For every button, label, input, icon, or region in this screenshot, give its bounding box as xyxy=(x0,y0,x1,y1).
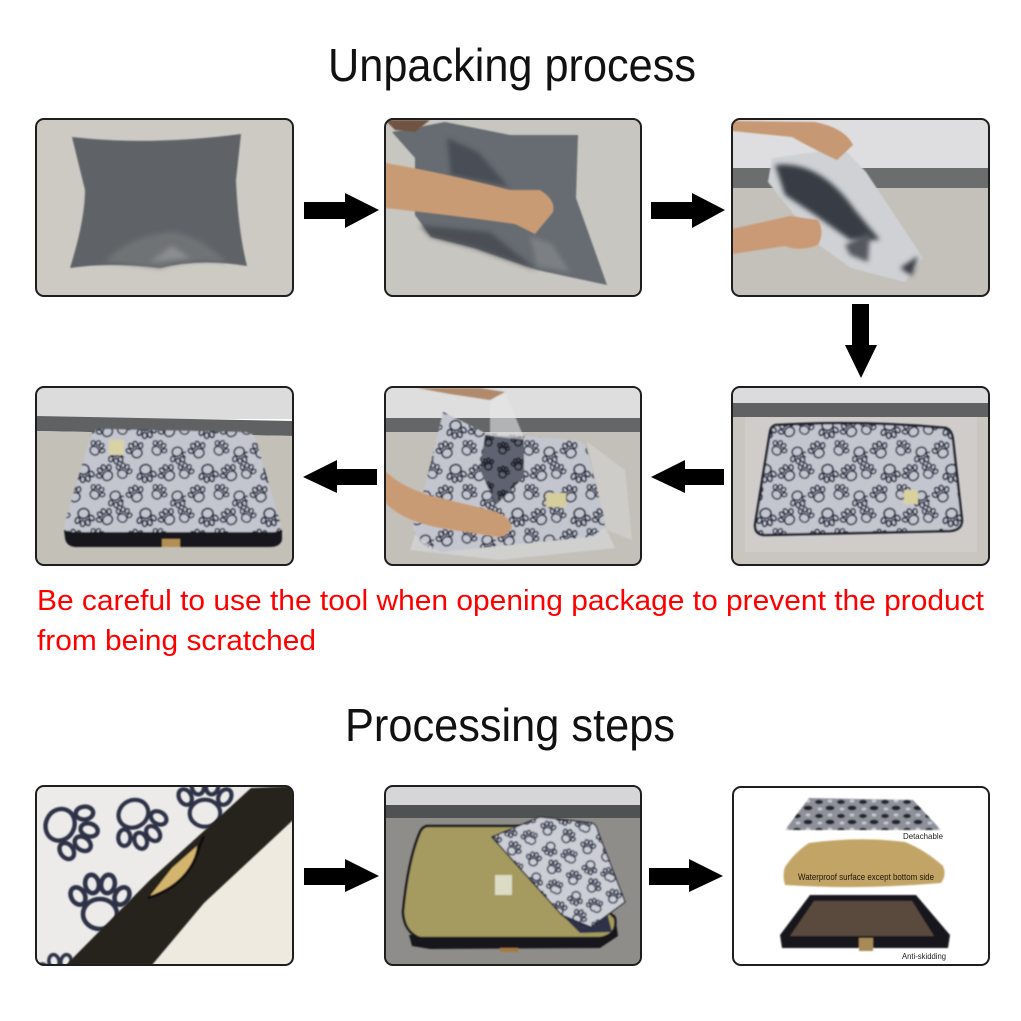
heading: Unpacking process: Unpacking process xyxy=(328,39,696,91)
icon: bed in clear plastic xyxy=(410,411,632,560)
panel: pulling plastic off the bed xyxy=(385,387,641,565)
arrow: step 3 down to 4 xyxy=(845,304,877,378)
icon: wrapped paw bed xyxy=(755,423,962,535)
arrow: step 1 to 2 xyxy=(304,193,379,228)
icon: anti-skid base tray xyxy=(780,895,950,951)
icon: black zipper band xyxy=(66,786,293,965)
warning text: from being scratched xyxy=(37,625,316,657)
icon: detachable cover xyxy=(785,798,941,830)
warning text: Be careful to use the tool when opening package to prevent the product xyxy=(37,585,984,617)
icon: arm and fist xyxy=(385,120,553,234)
arrow: processing step 1 to 2 xyxy=(304,859,379,892)
label: waterproof surface: Waterproof surface except bottom side xyxy=(798,872,934,883)
arrow: step 4 to 5 xyxy=(651,460,724,493)
icon: waterproof cushion xyxy=(784,839,945,887)
panel: bed still sealed in clear plastic xyxy=(732,387,989,565)
icon: two hands xyxy=(732,121,853,254)
icon: product in clear bag xyxy=(768,148,923,282)
icon: grey bag xyxy=(70,134,247,268)
icon: folded paw cover xyxy=(492,817,625,927)
panel: cover pulled back to show inner cushion xyxy=(385,786,641,965)
icon: cream background corner xyxy=(152,820,293,965)
label: detachable: Detachable xyxy=(903,831,943,841)
panel: finished bed with paw print cover xyxy=(36,387,293,565)
panel: hands pulling product in clear plastic xyxy=(732,119,989,296)
icon: arms xyxy=(385,388,512,537)
panel: sealed grey mailing bag on carpet xyxy=(36,119,293,296)
icon: olive inner cushion xyxy=(403,826,618,952)
arrow: processing step 2 to 3 xyxy=(649,859,723,892)
icon: large paw prints xyxy=(39,787,235,964)
arrow: step 2 to 3 xyxy=(651,193,725,228)
arrow: step 5 to 6 xyxy=(303,460,377,493)
panel: zipper close-up xyxy=(35,785,294,966)
heading: Processing steps: Processing steps xyxy=(345,699,675,751)
panel: arm tearing open bag xyxy=(385,119,641,296)
icon: opened grey bag xyxy=(392,122,607,285)
icon: paw print bed xyxy=(64,429,282,547)
label: anti-skidding: Anti-skidding xyxy=(902,951,946,961)
panel: exploded view of bed layers xyxy=(733,787,989,965)
